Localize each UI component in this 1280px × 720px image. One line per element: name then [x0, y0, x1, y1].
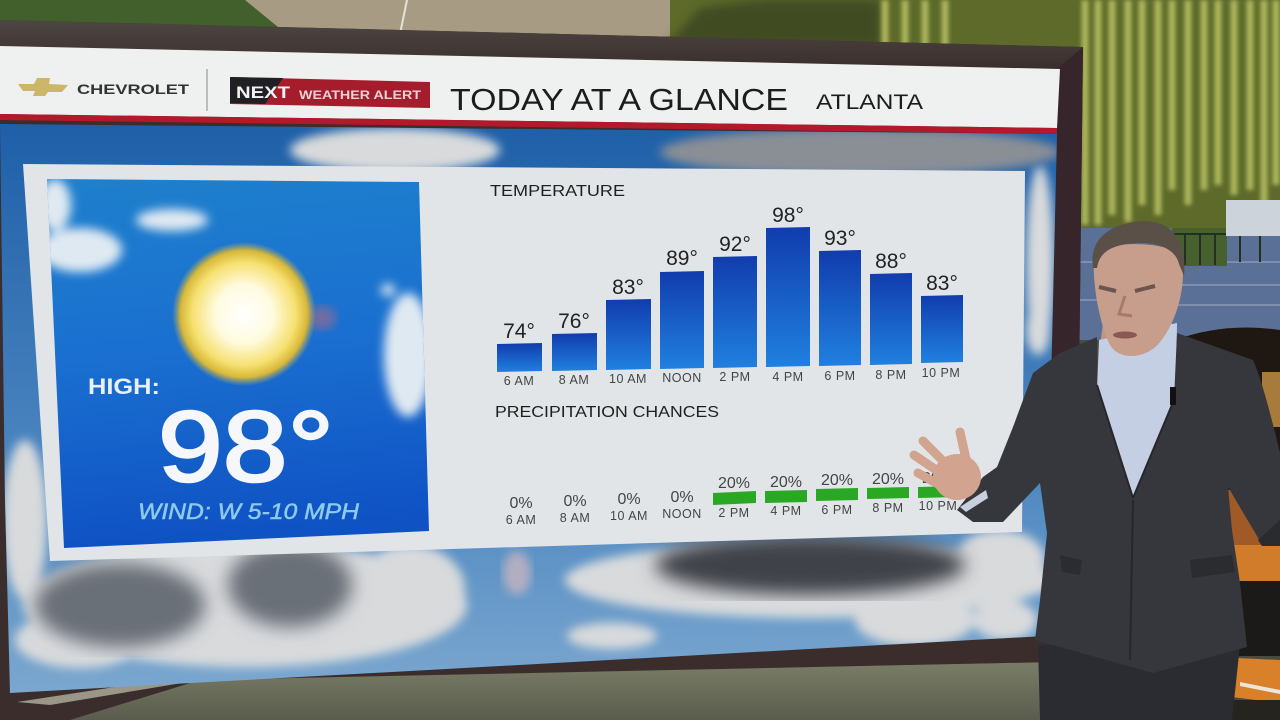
bar chart: precipitation: 0% [670, 489, 694, 506]
bar chart: precipitation: 8 AM [560, 511, 590, 525]
bar chart: temperature: 6 PM [824, 369, 856, 383]
bar chart: precipitation: 0% [617, 491, 641, 508]
high value: 98° [158, 391, 334, 503]
nose [1119, 296, 1132, 316]
clouds [38, 179, 432, 417]
red lens glare [308, 306, 336, 330]
bar chart: precipitation: 6 PM [821, 503, 853, 517]
bar chart: precipitation: 6 AM [506, 513, 536, 527]
header bar [0, 46, 1060, 134]
face [1094, 244, 1183, 356]
bar chart: precipitation: 10 AM [610, 509, 648, 523]
sponsor logo: Chevrolet [18, 78, 190, 97]
heading: temperature: TEMPERATURE [490, 183, 625, 200]
bar chart: precipitation: 8 PM [872, 501, 904, 515]
bar chart: temperature: 89° [666, 247, 698, 270]
main white panel [23, 164, 1025, 561]
Next Weather Alert badge [230, 77, 430, 108]
neck [1100, 310, 1175, 372]
bar chart: temperature [497, 204, 963, 388]
bar chart: precipitation [506, 470, 960, 527]
bar chart: temperature: 83° [612, 276, 644, 299]
bar chart: temperature: 6 AM [504, 374, 534, 388]
bar chart: precipitation: 4 PM [770, 504, 802, 518]
bar chart: temperature: NOON [662, 371, 702, 385]
shirt [1097, 323, 1177, 498]
bar chart: precipitation: 20% [922, 470, 954, 487]
title: TODAY AT A GLANCE [450, 82, 788, 117]
bar chart: precipitation: NOON [662, 507, 702, 521]
presenter [914, 221, 1280, 720]
eyes and brows [1099, 286, 1155, 291]
bar chart: temperature: 93° [824, 227, 856, 250]
trousers [1038, 645, 1240, 720]
mouth [1113, 332, 1137, 338]
bar chart: precipitation: 20% [770, 474, 802, 491]
high label: HIGH: [88, 374, 160, 399]
studio floor [70, 662, 1060, 720]
screen: sky background [0, 124, 1060, 693]
bar chart: temperature: 8 AM [559, 373, 589, 387]
icon: sun [172, 242, 316, 386]
bar chart: temperature: 4 PM [772, 370, 804, 384]
sponsor logo: Chevrolet: CHEVROLET [77, 81, 190, 97]
bar chart: precipitation: 20% [872, 471, 904, 488]
bar chart: precipitation: 20% [821, 472, 853, 489]
bar chart: temperature: 74° [503, 320, 535, 343]
bar chart: precipitation: 10 PM [919, 499, 957, 513]
bar chart: temperature: 10 AM [609, 372, 647, 386]
shirt cuff [960, 490, 988, 512]
hand [914, 432, 981, 500]
bar chart: temperature: 10 PM [922, 366, 960, 380]
red header rule [0, 114, 1057, 134]
bar chart: temperature: 76° [558, 310, 590, 333]
bar chart: temperature: 8 PM [875, 368, 907, 382]
bar chart: precipitation: 2 PM [718, 506, 750, 520]
bar chart: precipitation: 0% [563, 493, 587, 510]
bar chart: temperature: 92° [719, 233, 751, 256]
panel: high temperature [38, 179, 432, 548]
wind: WIND: W 5-10 MPH [138, 499, 359, 524]
jacket pockets [1060, 555, 1235, 578]
lapel mic [1170, 387, 1176, 405]
bar chart: precipitation: 20% [718, 475, 750, 492]
Next Weather Alert badge: NEXT [236, 83, 291, 102]
location: ATLANTA [816, 91, 923, 114]
lapel shading [1097, 385, 1174, 660]
jacket [957, 333, 1280, 673]
Next Weather Alert badge: WEATHER ALERT [299, 88, 422, 102]
bar chart: temperature: 88° [875, 250, 907, 273]
bridge wall [1075, 200, 1280, 340]
hair [1092, 221, 1184, 276]
bar chart: temperature: 98° [772, 204, 804, 227]
bar chart: precipitation: 0% [509, 495, 533, 512]
bar chart: temperature: 2 PM [719, 370, 751, 384]
right hand glove shadow [1258, 520, 1280, 546]
heading: precipitation chances: PRECIPITATION CHANCES [495, 404, 719, 421]
bar chart: temperature: 83° [926, 272, 958, 295]
